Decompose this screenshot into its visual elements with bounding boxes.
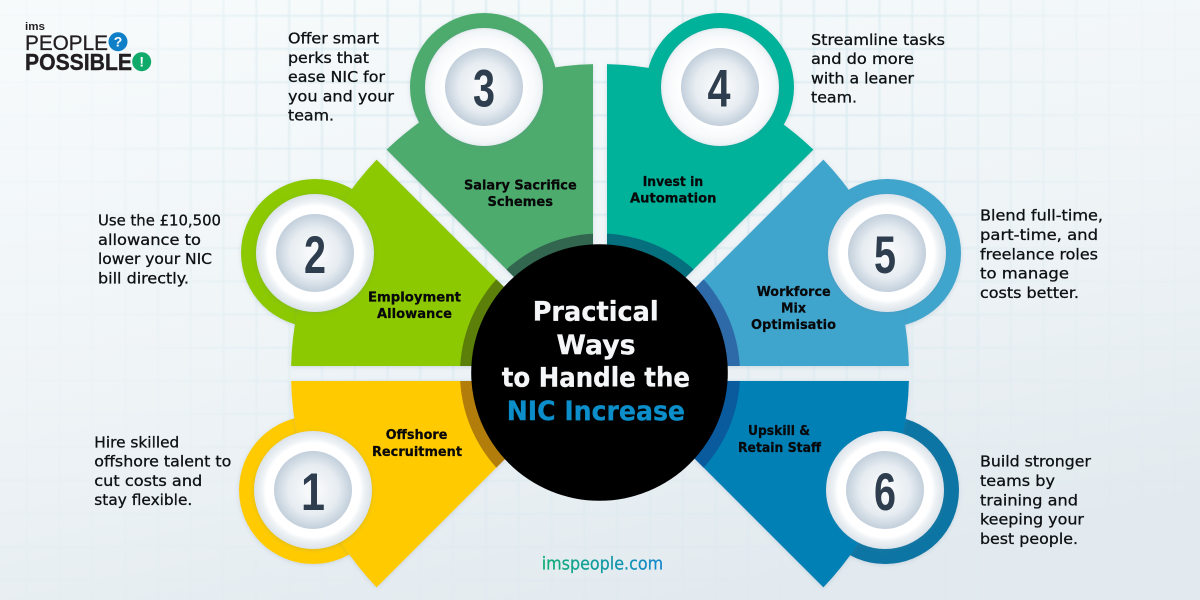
label: Employment Allowance bbox=[368, 290, 462, 322]
panel: 4 invest in automation bbox=[606, 12, 944, 278]
logo: ims People Possible: PEOPLE bbox=[25, 31, 108, 55]
description 5: Blend full-time, bbox=[980, 207, 1103, 225]
panel: 1 offshore recruitment bbox=[94, 381, 506, 588]
description 3: ease NIC for bbox=[288, 68, 386, 86]
description 5: to manage bbox=[980, 265, 1069, 283]
logo: ims People Possible bbox=[25, 21, 151, 75]
description 6: Build stronger bbox=[980, 453, 1092, 471]
number badge 1 bbox=[254, 431, 372, 549]
description 4: Streamline tasks bbox=[811, 31, 945, 49]
title bbox=[502, 297, 690, 427]
website url: imspeople.com bbox=[542, 554, 663, 574]
title: Ways bbox=[556, 330, 636, 361]
label: Upskill & Retain Staff bbox=[738, 423, 822, 456]
label: Workforce Mix Optimisatio: Optimisatio bbox=[751, 317, 836, 333]
panel: 2 employment allowance bbox=[98, 160, 504, 368]
label: Salary Sacrifice Schemes bbox=[464, 177, 577, 210]
description 1: offshore talent to bbox=[94, 453, 231, 471]
description 5: freelance roles bbox=[980, 245, 1098, 263]
description 4: team. bbox=[811, 88, 857, 106]
label: Offshore Recruitment: Offshore bbox=[386, 427, 447, 443]
label: Workforce Mix Optimisatio bbox=[751, 284, 836, 333]
number badge 5 bbox=[828, 194, 946, 312]
description 6 bbox=[980, 453, 1092, 548]
label: Salary Sacrifice Schemes: Salary Sacrifice bbox=[464, 177, 577, 193]
description 4: with a leaner bbox=[811, 70, 915, 88]
label: Workforce Mix Optimisatio: Mix bbox=[781, 301, 806, 317]
description 6: best people. bbox=[980, 530, 1078, 548]
label: Upskill & Retain Staff: Upskill & bbox=[748, 423, 810, 439]
description 1: cut costs and bbox=[94, 472, 202, 490]
label: Upskill & Retain Staff: Retain Staff bbox=[738, 440, 822, 456]
description 2: allowance to bbox=[98, 231, 201, 249]
label: Invest in Automation: Invest in bbox=[643, 174, 703, 190]
description 3: you and your bbox=[288, 88, 395, 106]
label: Salary Sacrifice Schemes: Schemes bbox=[488, 194, 553, 210]
number badge 4: 4 bbox=[708, 60, 731, 118]
description 2: Use the £10,500 bbox=[98, 212, 221, 230]
number badge 2: 2 bbox=[304, 226, 326, 285]
number badge 1: 1 bbox=[301, 463, 325, 522]
label: Workforce Mix Optimisatio: Workforce bbox=[757, 284, 831, 300]
description 1 bbox=[94, 433, 231, 509]
number badge 2 bbox=[256, 194, 374, 312]
number badge 5: 5 bbox=[874, 226, 896, 285]
logo: ims People Possible: ? bbox=[114, 34, 122, 50]
title: Practical bbox=[533, 297, 659, 328]
panel: 6 upskill and retain staff bbox=[694, 381, 1092, 588]
number badge 4 bbox=[661, 28, 779, 146]
description 6: teams by bbox=[980, 472, 1055, 490]
description 3 bbox=[288, 30, 395, 124]
center circle with title bbox=[471, 244, 728, 501]
logo: ims People Possible: POSSIBLE bbox=[25, 49, 132, 75]
description 5 bbox=[980, 207, 1103, 302]
description 6: training and bbox=[980, 491, 1078, 509]
description 4: and do more bbox=[811, 50, 914, 68]
description 1: stay flexible. bbox=[94, 491, 192, 509]
number badge 6 bbox=[826, 431, 944, 549]
title: NIC Increase bbox=[507, 396, 685, 427]
description 6: keeping your bbox=[980, 511, 1085, 529]
description 2: lower your NIC bbox=[98, 250, 212, 268]
description 1: Hire skilled bbox=[94, 433, 179, 451]
logo: ims People Possible: ims bbox=[25, 21, 45, 33]
description 5: costs better. bbox=[980, 284, 1079, 302]
description 4 bbox=[811, 31, 945, 106]
label: Invest in Automation: Automation bbox=[630, 191, 716, 207]
logo: ims People Possible: ! bbox=[139, 54, 144, 70]
label: Invest in Automation bbox=[630, 174, 716, 207]
title: to Handle the bbox=[502, 363, 690, 394]
number badge 6: 6 bbox=[874, 463, 896, 522]
number badge 3: 3 bbox=[473, 60, 495, 118]
description 5: part-time, and bbox=[980, 226, 1098, 244]
description 2 bbox=[98, 212, 221, 288]
label: Offshore Recruitment bbox=[372, 427, 463, 460]
label: Employment Allowance: Employment bbox=[368, 290, 462, 306]
number badge 3 bbox=[425, 28, 543, 146]
label: Employment Allowance: Allowance bbox=[377, 306, 452, 322]
description 3: Offer smart bbox=[288, 30, 379, 48]
description 2: bill directly. bbox=[98, 270, 189, 288]
label: Offshore Recruitment: Recruitment bbox=[372, 444, 463, 460]
description 3: perks that bbox=[288, 49, 369, 67]
panel: 3 salary sacrifice schemes bbox=[288, 12, 594, 278]
panel: 5 workforce mix optimisation bbox=[696, 160, 1102, 368]
description 3: team. bbox=[288, 106, 334, 124]
